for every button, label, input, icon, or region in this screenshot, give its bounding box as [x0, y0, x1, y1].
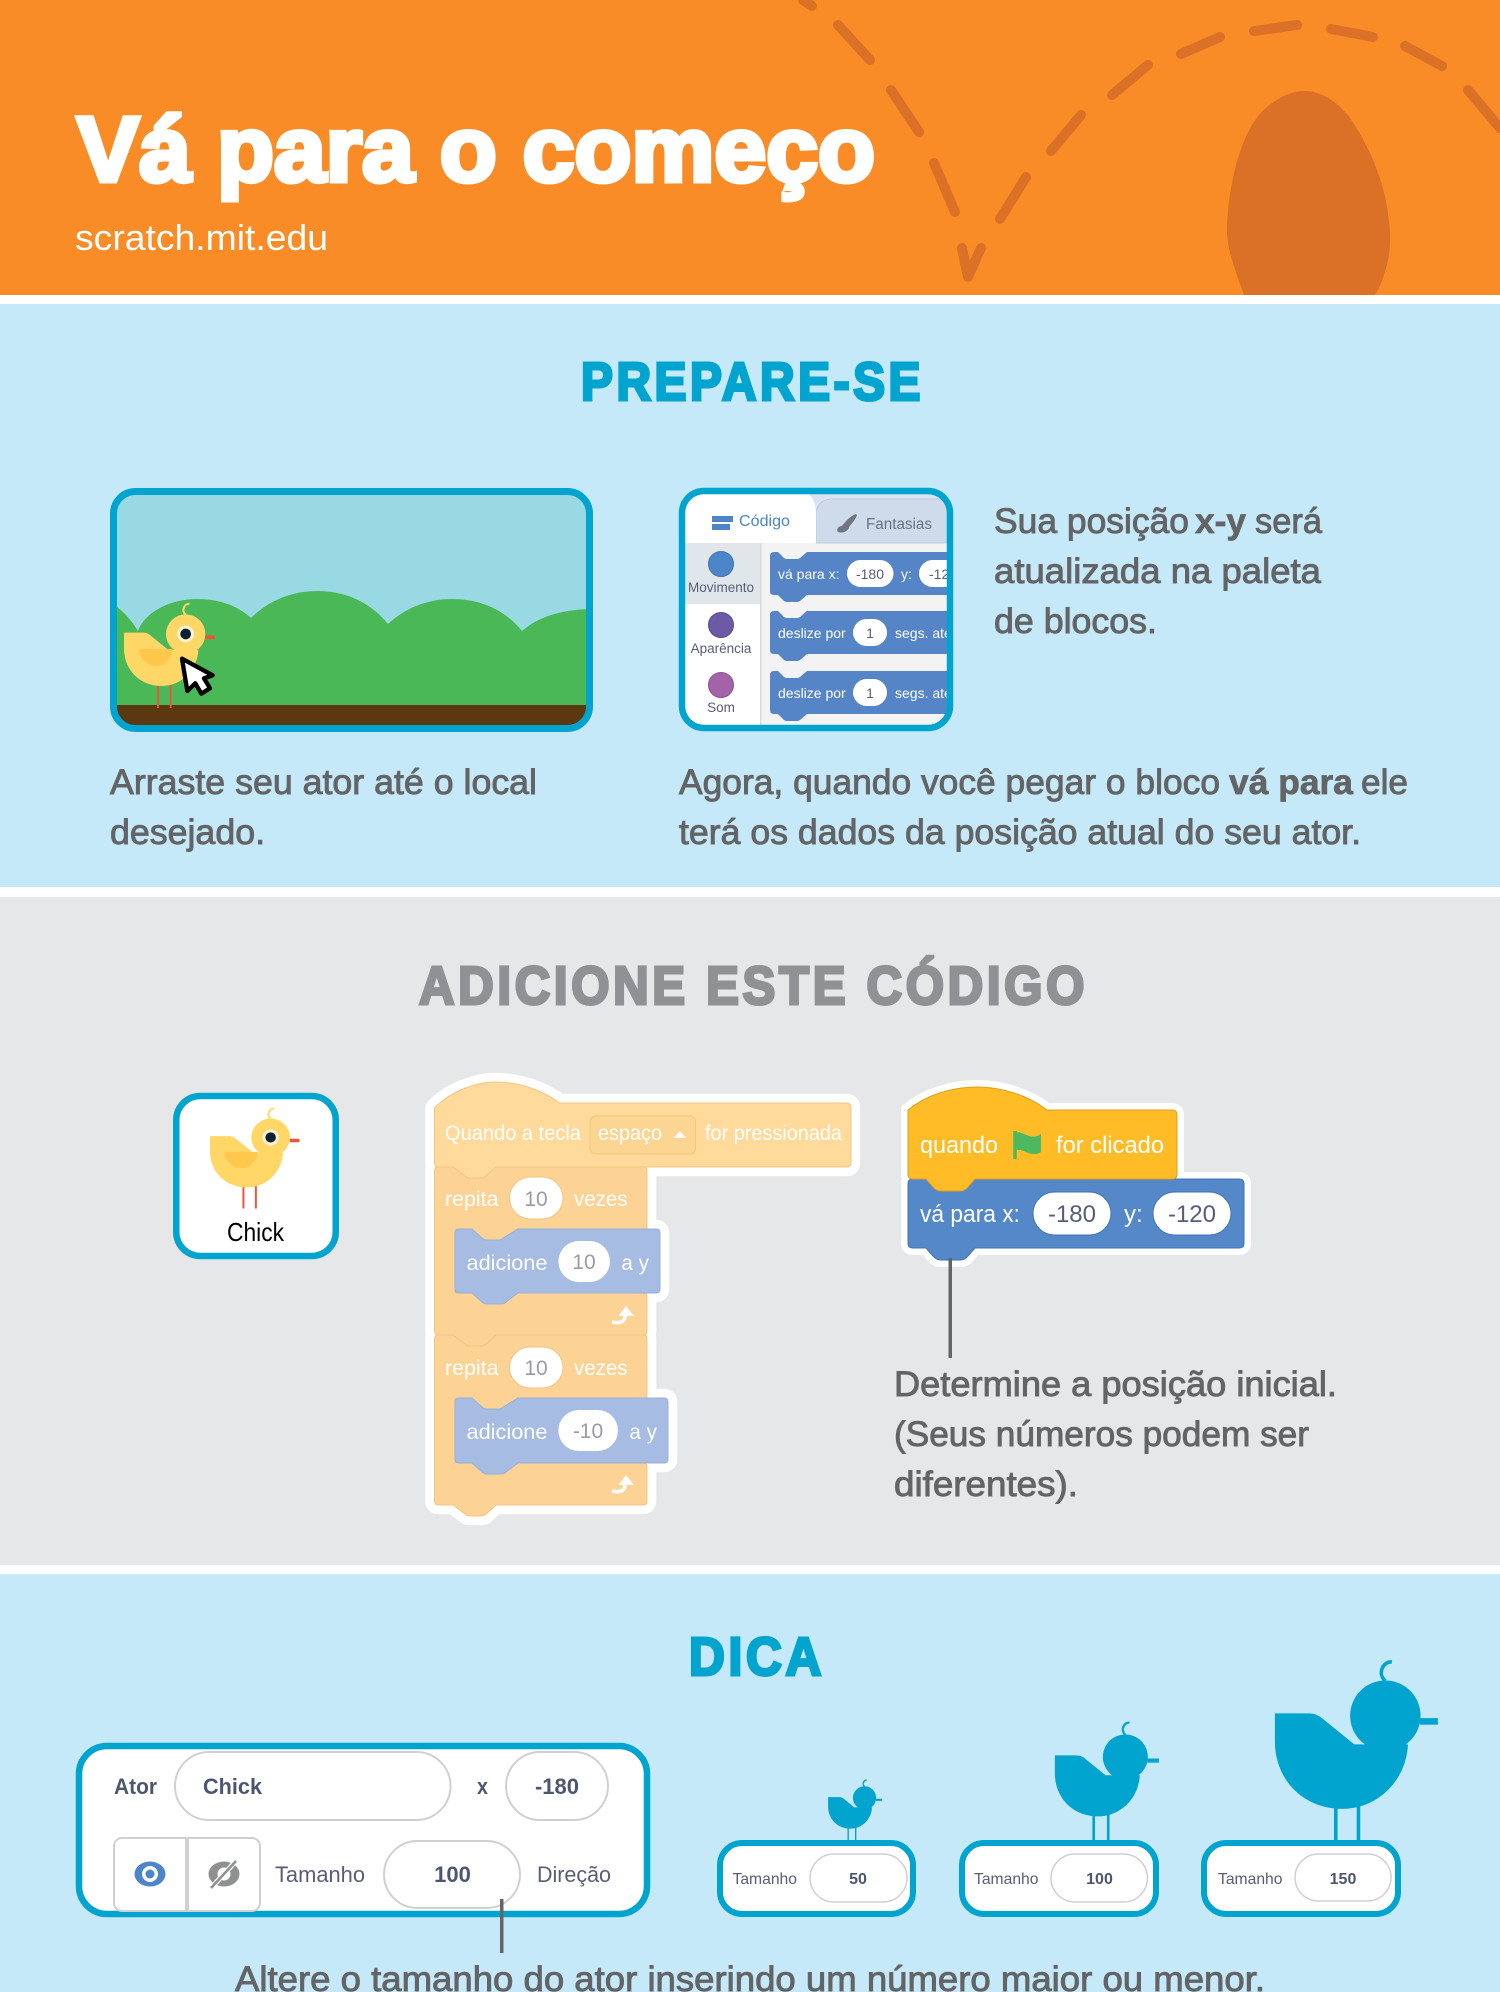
code stack: flag and go to: -180 — [1048, 1201, 1096, 1228]
text: position updated: será — [1255, 502, 1323, 541]
sprite properties panel: Ator — [114, 1774, 157, 1799]
icon: small bird silhouette — [828, 1780, 882, 1842]
code stack: faded space key script: Quando a tecla — [445, 1122, 581, 1145]
icon: eye hidden — [208, 1861, 240, 1888]
motion blocks: vá para x: — [778, 566, 839, 582]
text: position updated: de blocos. — [994, 602, 1157, 641]
heading: dica: DICA — [689, 1627, 825, 1687]
text: drag sprite: desejado. — [110, 813, 265, 852]
sprite properties panel: 100 — [434, 1862, 471, 1887]
text: go to block: ele — [1361, 763, 1408, 802]
tabs — [686, 494, 947, 544]
visibility toggle — [114, 1838, 260, 1911]
text: initial position — [894, 1365, 1337, 1504]
code stack: faded space key script: vezes — [574, 1357, 628, 1380]
text: position updated: x-y — [1195, 502, 1247, 541]
code stack: faded space key script: -10 — [573, 1420, 603, 1443]
text: go to block: Agora, quando você pegar o bloco — [679, 763, 1220, 802]
text: go to block: vá para — [1229, 763, 1354, 802]
code stack: flag and go to: y: — [1124, 1201, 1143, 1228]
text: initial position: (Seus números podem ser — [894, 1415, 1309, 1454]
text: initial position: diferentes). — [894, 1465, 1078, 1504]
size card 50: Tamanho — [732, 1871, 797, 1888]
icon: large bird silhouette — [1275, 1662, 1438, 1848]
size card 50: 50 — [849, 1871, 867, 1888]
panel: prepare-se — [0, 304, 1500, 887]
code stack: faded space key script: 10 — [524, 1188, 548, 1211]
panel: dica — [0, 1574, 1500, 1992]
code stack: flag and go to: quando — [920, 1132, 998, 1159]
panel: adicione este codigo — [0, 897, 1500, 1565]
heading: adicione este codigo: ADICIONE ESTE CÓDIGO — [419, 956, 1088, 1016]
category sidebar: Aparência — [691, 641, 752, 656]
sprite properties panel: -180 — [535, 1774, 579, 1799]
size card 100 — [962, 1843, 1156, 1914]
motion blocks: y: — [901, 566, 912, 582]
sprite properties panel: Tamanho — [275, 1862, 365, 1887]
icon: eye — [134, 1862, 166, 1886]
subtitle url: scratch.mit.edu — [75, 217, 328, 258]
text: go to block — [679, 763, 1408, 852]
motion blocks: deslize por — [778, 625, 846, 641]
tabs: Código — [739, 513, 790, 530]
motion blocks: 1 — [866, 685, 874, 701]
code stack: faded space key script: repita — [445, 1188, 499, 1211]
icon: chick on stage — [124, 604, 215, 708]
code stack: faded space key script: 10 — [524, 1357, 548, 1380]
text: initial position: Determine a posição inicial. — [894, 1365, 1337, 1404]
title: Vá para o começo — [77, 99, 875, 201]
size card 150: 150 — [1330, 1871, 1356, 1888]
tabs: Fantasias — [866, 516, 932, 533]
code stack: flag and go to: -120 — [1168, 1201, 1216, 1228]
code stack: faded space key script — [434, 1082, 851, 1516]
motion blocks: segs. até — [895, 685, 952, 701]
code stack: faded space key script: espaço — [598, 1122, 662, 1145]
header banner — [0, 0, 1500, 295]
icon: green flag — [1015, 1131, 1041, 1159]
sprite properties panel: Direção — [537, 1862, 611, 1887]
motion blocks: -180 — [856, 566, 884, 582]
category sidebar — [685, 543, 762, 725]
code stack: flag and go to: for clicado — [1056, 1132, 1164, 1159]
icon: egg shape — [1227, 91, 1390, 295]
sprite properties panel: Chick — [203, 1774, 263, 1799]
code stack: faded space key script: a y — [621, 1252, 649, 1275]
size card 100: 100 — [1086, 1871, 1113, 1888]
code stack: faded space key script: a y — [629, 1421, 657, 1444]
text: drag sprite — [110, 763, 537, 852]
code stack: faded space key script: adicione — [466, 1421, 548, 1444]
icon: mouse cursor — [182, 659, 213, 694]
icon: loop arrow — [612, 1306, 634, 1323]
icon: medium bird silhouette — [1055, 1723, 1159, 1842]
block palette screenshot — [679, 488, 965, 731]
code stack: flag and go to: vá para x: — [920, 1201, 1020, 1228]
icon: dashed jump path — [803, 0, 1500, 277]
motion blocks — [770, 552, 965, 721]
sprite properties panel: x — [477, 1774, 489, 1799]
leader line — [948, 1258, 952, 1358]
code stack: faded space key script: for pressionada — [705, 1122, 842, 1145]
text: position updated: atualizada na paleta — [994, 552, 1322, 591]
category sidebar: Movimento — [688, 580, 754, 595]
text: position updated: Sua posição — [994, 502, 1189, 541]
heading: prepare-se: PREPARE-SE — [581, 352, 924, 412]
code stack: flag and go to — [908, 1087, 1244, 1260]
text: drag sprite: Arraste seu ator até o local — [110, 763, 537, 802]
text: position updated — [994, 502, 1323, 641]
code stack: faded space key script: adicione — [466, 1252, 548, 1275]
code stack: faded space key script: repita — [445, 1357, 499, 1380]
text: go to block: terá os dados da posição atual do seu ator. — [679, 813, 1361, 852]
motion blocks: segs. até — [895, 625, 952, 641]
size card 50 — [720, 1843, 913, 1914]
motion blocks: deslize por — [778, 685, 846, 701]
category sidebar: Som — [707, 700, 735, 715]
sprite properties panel — [79, 1746, 647, 1914]
motion blocks: -120 — [929, 566, 957, 582]
sprite card: chick — [176, 1096, 336, 1256]
size card 150: Tamanho — [1218, 1871, 1283, 1888]
code stack: faded space key script: vezes — [574, 1188, 628, 1211]
sprite card: chick: Chick — [227, 1217, 285, 1247]
icon: loop arrow — [612, 1475, 634, 1492]
code stack: faded space key script: 10 — [572, 1251, 596, 1274]
stage scene — [110, 488, 593, 732]
leader line — [500, 1899, 504, 1953]
size card 150 — [1204, 1843, 1398, 1914]
size card 100: Tamanho — [974, 1871, 1039, 1888]
icon: chick sprite — [210, 1109, 300, 1208]
motion blocks: 1 — [866, 625, 874, 641]
